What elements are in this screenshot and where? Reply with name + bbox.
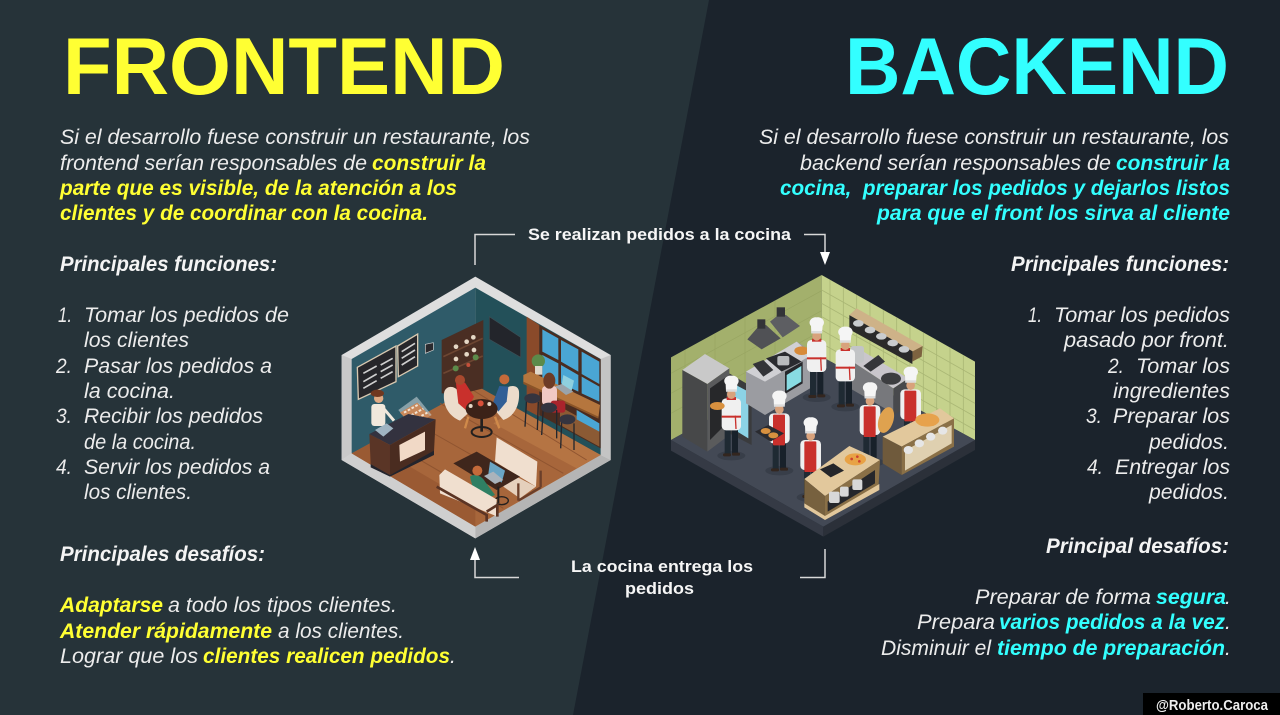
text block: backend challenges: .: [1225, 586, 1231, 609]
illustration: restaurant dining room: [342, 277, 611, 538]
text block: backend challenges: Preparar de forma: [975, 586, 1151, 609]
text block: backend intro: para que el front los sirva al cliente: [876, 202, 1230, 225]
text block: backend challenges: Prepara: [917, 611, 995, 634]
text block: frontend challenges: Adaptarse: [59, 594, 163, 617]
lounge table: [453, 452, 520, 490]
heading: backend functions: Principales funciones:: [1011, 253, 1229, 276]
list: frontend functions: los clientes: [84, 329, 189, 352]
front counter with pizza: [804, 446, 880, 520]
list: frontend functions: 4.: [56, 456, 72, 479]
text block: backend intro: construir la: [1116, 152, 1230, 175]
list: frontend functions: 2.: [55, 355, 72, 378]
bar counter: [523, 372, 600, 419]
credit badge: [1143, 693, 1280, 715]
list: frontend functions: 3.: [56, 405, 72, 428]
list: backend functions: Entregar los: [1115, 456, 1230, 479]
heading: frontend challenges: Principales desafíos:: [60, 543, 265, 566]
heading: backend challenges: Principal desafíos:: [1046, 535, 1229, 558]
list: frontend functions: Recibir los pedidos: [84, 405, 263, 428]
text block: backend challenges: [881, 586, 1231, 660]
pizza tray: [755, 425, 784, 442]
text block: backend intro: Si el desarrollo fuese construir un restaurante, los: [759, 126, 1229, 149]
arrow: bottom left to cafe: [470, 547, 519, 578]
list: frontend functions: [55, 304, 289, 504]
heading: frontend functions: Principales funciones:: [60, 253, 277, 276]
list: frontend functions: Tomar los pedidos de: [84, 304, 289, 327]
menu boards: [357, 334, 433, 399]
text block: frontend intro: frontend serían responsables de: [60, 152, 367, 175]
range hoods: [747, 307, 800, 349]
wood floor: [352, 385, 601, 527]
list: backend functions: Tomar los: [1136, 355, 1230, 378]
text block: backend challenges: .: [1225, 611, 1231, 634]
text block: backend intro: [759, 126, 1230, 225]
list: backend functions: 2.: [1107, 355, 1124, 378]
text block: backend challenges: Disminuir el: [881, 637, 992, 660]
text block: backend challenges: .: [1225, 637, 1231, 660]
text block: frontend challenges: clientes realicen pedidos: [203, 645, 450, 668]
chef at stove: [803, 317, 831, 402]
label: kitchen delivers orders: [571, 557, 753, 598]
illustration: kitchen: [671, 275, 975, 537]
fridge: [682, 354, 752, 452]
list: backend functions: Tomar los pedidos: [1054, 304, 1231, 327]
text block: frontend challenges: a todo los tipos clientes.: [168, 594, 397, 617]
label: kitchen delivers orders: pedidos: [625, 579, 694, 598]
woman with laptop: [470, 462, 508, 505]
list: backend functions: pedidos.: [1148, 431, 1229, 454]
sofa back: [495, 437, 541, 501]
bookshelf: [442, 320, 483, 393]
list: frontend functions: Servir los pedidos a: [84, 456, 270, 479]
text block: frontend challenges: Atender rápidamente: [59, 620, 272, 643]
chef rolling dough: [897, 367, 925, 451]
list: backend functions: pasado por front.: [1063, 329, 1229, 352]
list: backend functions: ingredientes: [1113, 380, 1231, 403]
list: backend functions: pedidos.: [1148, 481, 1229, 504]
barista: [371, 390, 394, 426]
chef at worktop: [831, 327, 859, 411]
text block: frontend challenges: a los clientes.: [278, 620, 404, 643]
arrow: top right to kitchen: [804, 234, 830, 265]
armchairs with two women: [444, 374, 519, 421]
arrow: bottom right connector: [800, 549, 825, 578]
list: backend functions: [1028, 304, 1231, 504]
text block: backend challenges: segura: [1156, 586, 1226, 609]
text block: frontend intro: Si el desarrollo fuese construir un restaurante, los: [60, 126, 530, 149]
label: orders to kitchen: Se realizan pedidos a la cocina: [528, 225, 792, 244]
room shell: [342, 277, 611, 538]
stove: [746, 342, 812, 415]
room walls and floor: [671, 275, 975, 537]
woman at bar with laptop: [542, 373, 574, 413]
text block: frontend intro: construir la: [372, 152, 486, 175]
service counter: [369, 414, 436, 477]
text block: frontend challenges: Lograr que los: [60, 645, 199, 668]
chef at front counter: [797, 417, 825, 502]
chef at fridge: [717, 376, 745, 460]
window wall: [527, 317, 601, 448]
chef with dough: [856, 382, 884, 467]
chef with tray: [765, 391, 793, 475]
shelf with bowls: [849, 308, 923, 364]
title: backend: BACKEND: [845, 22, 1229, 112]
list: frontend functions: 1.: [58, 304, 72, 327]
list: backend functions: 1.: [1028, 304, 1042, 327]
bar stools: [524, 393, 575, 450]
pastry display: [398, 397, 432, 427]
list: frontend functions: de la cocina.: [84, 431, 196, 454]
television: [489, 317, 521, 357]
title: frontend: FRONTEND: [63, 22, 505, 112]
arrow: top left connector: [475, 234, 515, 265]
text block: backend challenges: tiempo de preparación: [997, 637, 1225, 660]
list: backend functions: 4.: [1087, 456, 1103, 479]
text block: frontend intro: [59, 126, 530, 225]
text block: backend intro: cocina, preparar los pedidos y dejarlos listos: [780, 177, 1230, 200]
text block: frontend intro: clientes y de coordinar con la cocina.: [60, 202, 428, 225]
sofa front: [437, 469, 497, 522]
text block: backend intro: backend serían responsables de: [800, 152, 1111, 175]
text block: frontend challenges: [59, 594, 456, 668]
credit badge: @Roberto.Caroca: [1156, 698, 1269, 714]
list: backend functions: 3.: [1086, 405, 1102, 428]
dough: [875, 405, 897, 435]
list: frontend functions: la cocina.: [84, 380, 175, 403]
pizza tray at fridge: [710, 402, 725, 410]
text block: backend challenges: varios pedidos a la vez: [999, 611, 1225, 634]
worktop with sink: [850, 346, 908, 415]
list: frontend functions: los clientes.: [84, 481, 192, 504]
round table: [465, 399, 499, 437]
text block: frontend intro: parte que es visible, de la atención a los: [59, 177, 457, 200]
text block: frontend challenges: .: [450, 645, 456, 668]
dough counter: [883, 408, 954, 475]
list: frontend functions: Pasar los pedidos a: [84, 355, 272, 378]
label: kitchen delivers orders: La cocina entrega los: [571, 557, 753, 576]
list: backend functions: Preparar los: [1113, 405, 1231, 428]
